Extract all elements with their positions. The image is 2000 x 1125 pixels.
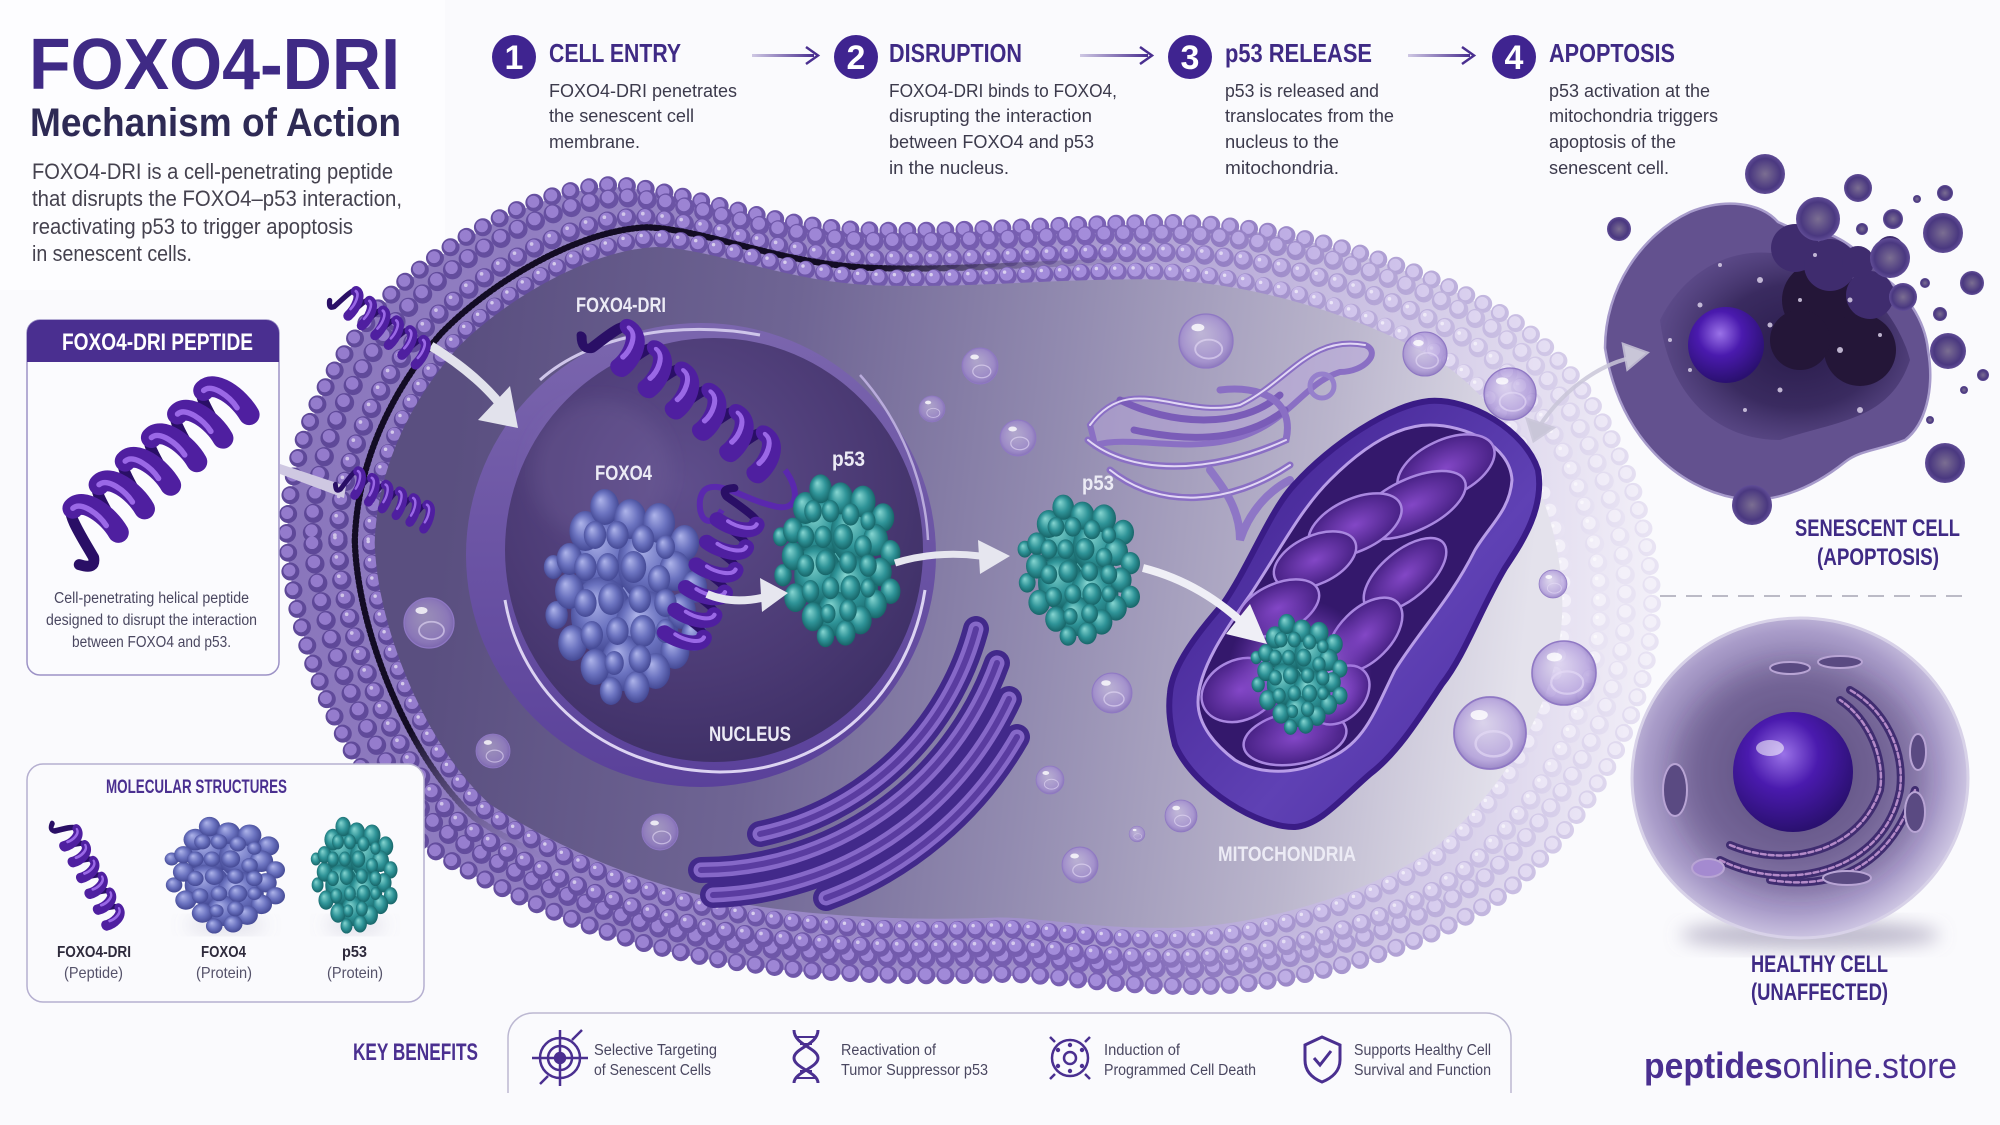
golgi apparatus xyxy=(1088,344,1372,540)
benefit 3 text xyxy=(1104,1042,1256,1079)
shadows under molecules xyxy=(186,918,385,932)
peptide panel heading: FOXO4-DRI PEPTIDE xyxy=(62,329,253,356)
step 2 body: disrupting the interaction xyxy=(889,105,1092,126)
label senescent cell xyxy=(1795,515,1960,571)
label healthy cell: HEALTHY CELL xyxy=(1751,951,1888,978)
benefit 2 text: Tumor Suppressor p53 xyxy=(841,1062,988,1079)
step 4 xyxy=(1492,35,1718,178)
step 4 body: senescent cell. xyxy=(1549,157,1669,178)
benefit 1 text: of Senescent Cells xyxy=(594,1062,711,1079)
healthy cell xyxy=(1632,618,1968,949)
membrane peptide top xyxy=(327,281,431,368)
vesicles xyxy=(404,314,1596,883)
cytoplasm xyxy=(375,247,1562,928)
benefit 4 text xyxy=(1354,1042,1491,1079)
endoplasmic reticulum xyxy=(701,629,1017,898)
step 3 body: p53 is released and xyxy=(1225,80,1379,101)
step 1 body: FOXO4-DRI penetrates xyxy=(549,80,737,101)
cell membrane xyxy=(286,184,1652,988)
step 2 body xyxy=(889,80,1117,178)
step 1 body: the senescent cell xyxy=(549,105,694,126)
step 4 body: apoptosis of the xyxy=(1549,131,1676,152)
step 1 body xyxy=(549,80,737,152)
title: FOXO4-DRI xyxy=(29,25,400,105)
step 1 heading: CELL ENTRY xyxy=(549,38,681,68)
step 1 xyxy=(492,35,737,152)
step 2 badge: 2 xyxy=(847,39,865,77)
arrow: cell to senescent cell xyxy=(1528,345,1646,440)
step 2 heading: DISRUPTION xyxy=(889,38,1022,68)
divider xyxy=(1660,595,1965,597)
label FOXO4-DRI: FOXO4-DRI xyxy=(576,294,666,317)
icon: programmed cell death xyxy=(1050,1037,1090,1079)
step 1 badge: 1 xyxy=(505,39,523,77)
step 1 badge xyxy=(492,35,536,79)
senescent cell undergoing apoptosis xyxy=(1605,154,1989,525)
membrane peptide lower xyxy=(334,464,435,532)
intro paragraph: reactivating p53 to trigger apoptosis xyxy=(32,214,353,239)
molecule labels: (Protein) xyxy=(327,965,383,982)
panel: key benefits xyxy=(508,1013,1511,1093)
intro paragraph: that disrupts the FOXO4–p53 interaction, xyxy=(32,186,402,211)
step 1 body: membrane. xyxy=(549,131,640,152)
nucleus xyxy=(466,323,936,787)
benefit 4 text: Survival and Function xyxy=(1354,1062,1491,1079)
key benefits heading: KEY BENEFITS xyxy=(353,1039,478,1066)
molecule labels: FOXO4 xyxy=(201,944,246,961)
arrow: p53 to mitochondrion xyxy=(1143,568,1267,644)
arrow 2 to 3 xyxy=(1080,47,1152,64)
benefit 3 text: Induction of xyxy=(1104,1042,1181,1059)
step 2 body: FOXO4-DRI binds to FOXO4, xyxy=(889,80,1117,101)
brand url: peptidesonline.store xyxy=(1644,1045,1957,1086)
label healthy cell xyxy=(1751,951,1888,1006)
label NUCLEUS: NUCLEUS xyxy=(709,723,791,746)
label MITOCHONDRIA: MITOCHONDRIA xyxy=(1218,843,1356,866)
arrow 3 to 4 xyxy=(1408,47,1474,64)
benefit 2 text: Reactivation of xyxy=(841,1042,937,1059)
icon: mini helix xyxy=(49,814,124,927)
label p53 cytoplasm: p53 xyxy=(1082,472,1114,495)
arrow 1 to 2 xyxy=(752,47,818,64)
intro paragraph: FOXO4-DRI is a cell-penetrating peptide xyxy=(32,159,393,184)
step 3 heading: p53 RELEASE xyxy=(1225,38,1372,68)
main senescent cell xyxy=(280,184,1652,988)
FOXO4 protein xyxy=(544,489,707,705)
step 4 body: mitochondria triggers xyxy=(1549,105,1718,126)
peptide panel header xyxy=(27,320,279,362)
step 2 body: between FOXO4 and p53 xyxy=(889,131,1094,152)
free p53 protein xyxy=(1018,495,1140,646)
subtitle: Mechanism of Action xyxy=(30,101,401,145)
icon: target xyxy=(532,1030,588,1086)
molecular heading: MOLECULAR STRUCTURES xyxy=(106,777,287,798)
arrow: nucleus to cytoplasm xyxy=(895,540,1010,574)
step 4 badge: 4 xyxy=(1505,39,1524,77)
step 4 body xyxy=(1549,80,1718,178)
step 4 heading: APOPTOSIS xyxy=(1549,38,1675,68)
arrow: card to membrane xyxy=(280,464,346,498)
intro paragraph: in senescent cells. xyxy=(32,241,192,266)
benefit 1 text xyxy=(594,1042,717,1079)
step 3 body xyxy=(1225,80,1394,178)
icon: shield xyxy=(1305,1037,1340,1082)
label p53 nucleus: p53 xyxy=(832,448,865,471)
icon: FOXO4 xyxy=(165,817,285,934)
molecule labels xyxy=(57,944,383,982)
step 3 body: translocates from the xyxy=(1225,105,1394,126)
left header backdrop xyxy=(0,0,445,290)
peptide caption: designed to disrupt the interaction xyxy=(46,612,257,629)
step 2 body: in the nucleus. xyxy=(889,157,1009,178)
step 2 badge xyxy=(834,35,878,79)
p53 protein in nucleus xyxy=(773,474,900,647)
icon: peptide helix xyxy=(47,376,255,571)
mitochondrion xyxy=(1169,401,1539,827)
panel: FOXO4-DRI peptide xyxy=(27,320,279,675)
intro paragraph xyxy=(32,159,402,266)
peptide caption: between FOXO4 and p53. xyxy=(72,634,231,651)
arrow: FOXO4 to p53 xyxy=(707,578,788,612)
step 2 xyxy=(834,35,1117,178)
icon: p53 xyxy=(311,817,398,934)
molecule labels: FOXO4-DRI xyxy=(57,944,131,961)
label senescent cell: (APOPTOSIS) xyxy=(1817,544,1939,571)
molecule labels: p53 xyxy=(342,944,367,961)
icon: DNA xyxy=(794,1030,818,1083)
benefit 2 text xyxy=(841,1042,988,1079)
step 4 badge xyxy=(1492,35,1536,79)
peptide caption xyxy=(46,590,257,651)
step 3 xyxy=(1168,35,1394,178)
benefit 1 text: Selective Targeting xyxy=(594,1042,717,1059)
healthy nucleus xyxy=(1733,712,1853,832)
FOXO4-DRI peptide on FOXO4 xyxy=(577,307,795,650)
label healthy cell: (UNAFFECTED) xyxy=(1751,979,1888,1006)
step 4 body: p53 activation at the xyxy=(1549,80,1710,101)
p53 protein in mitochondrion xyxy=(1251,614,1348,735)
arrow: membrane to nucleus xyxy=(431,346,518,428)
benefit 4 text: Supports Healthy Cell xyxy=(1354,1042,1491,1059)
molecule labels: (Protein) xyxy=(196,965,252,982)
peptide caption: Cell-penetrating helical peptide xyxy=(54,590,249,607)
label FOXO4: FOXO4 xyxy=(595,462,652,485)
step 3 badge: 3 xyxy=(1181,39,1199,77)
step 3 body: nucleus to the xyxy=(1225,131,1339,152)
benefit 3 text: Programmed Cell Death xyxy=(1104,1062,1256,1079)
step 3 body: mitochondria. xyxy=(1225,157,1339,178)
molecule labels: (Peptide) xyxy=(64,965,123,982)
panel: molecular structures xyxy=(27,764,424,1002)
step 3 badge xyxy=(1168,35,1212,79)
apoptotic fragments xyxy=(1607,154,1989,525)
